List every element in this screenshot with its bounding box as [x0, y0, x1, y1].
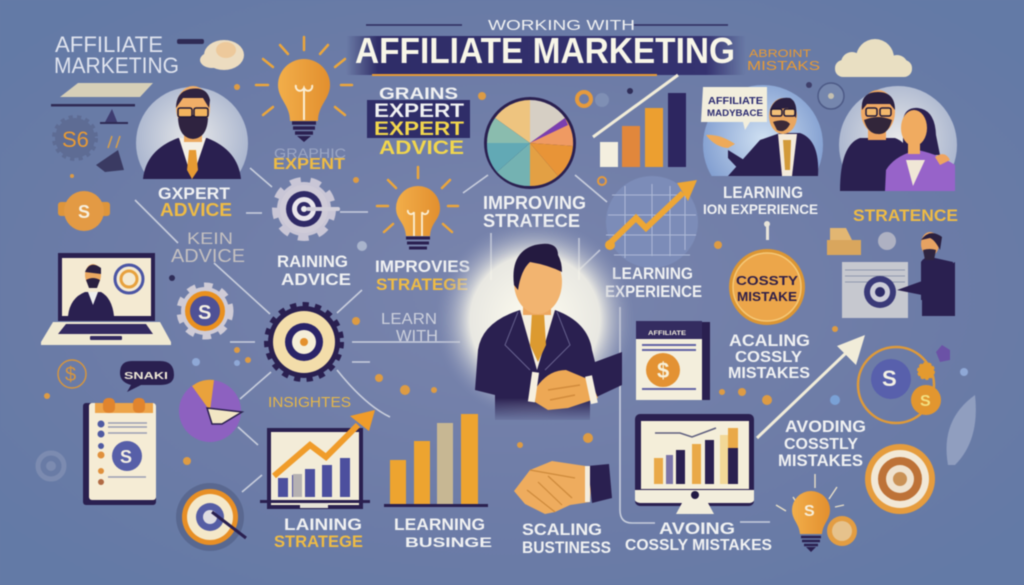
label: avoiding costly mistakes: COSSTLY	[784, 436, 858, 453]
label: acaling costly mistakes: ACALING	[729, 331, 810, 350]
icon: costly mistake coin	[729, 249, 805, 325]
label: avoing costly mistakes: AVOING	[659, 519, 735, 538]
speech bubble	[701, 87, 767, 130]
label: raining advice: RAINING	[277, 252, 348, 271]
icon: target right	[865, 444, 935, 514]
icon: coin left	[58, 191, 110, 231]
dark box	[367, 100, 470, 138]
suit	[475, 310, 622, 420]
chart: growth line on grid	[605, 176, 698, 268]
label: kein advice: KEIN	[187, 229, 233, 248]
label: learning business: LEARNING	[394, 515, 485, 534]
glow	[435, 220, 635, 420]
figure: presenter	[706, 98, 818, 176]
label: insightes: INSIGHTES	[268, 394, 351, 411]
label: improving strategy: IMPROVIES	[375, 257, 470, 276]
icon: dollar gear faint: S6	[62, 127, 89, 152]
label: learn with	[381, 311, 438, 345]
label: stratence: STRATENCE	[853, 206, 958, 225]
handshake	[535, 370, 598, 410]
label: improving strategy right: STRATECE	[483, 211, 580, 231]
title band	[346, 36, 746, 75]
heading: affiliate marketing corner: AFFILIATE	[55, 32, 163, 57]
label: expert advice: ADVICE	[160, 200, 232, 220]
icon: gear faint	[38, 453, 64, 479]
label: training strategy	[274, 515, 363, 551]
label: kein advice: ADVICE	[171, 246, 245, 266]
icon: clipboard	[83, 398, 156, 505]
speech bubble: MADYBACE	[707, 108, 763, 118]
chart: pie	[484, 97, 576, 189]
label: improving strategy	[375, 257, 470, 294]
label: acaling costly mistakes: COSSLY	[735, 349, 802, 366]
icon: small pin	[577, 88, 633, 185]
icon: book with dollar: $	[657, 358, 669, 383]
icon: small crate	[764, 221, 896, 255]
label: acaling costly mistakes: MISTAKES	[728, 365, 810, 382]
title	[346, 17, 746, 76]
icon: book with dollar: AFFILIATE	[648, 330, 687, 337]
label: learning experience center: EXPERIENCE	[605, 282, 702, 301]
label: expert advice: GXPERT	[158, 184, 231, 203]
icon: book with dollar	[636, 321, 710, 400]
icon: desk sketch	[51, 83, 153, 124]
icon: target lower left	[176, 483, 246, 551]
label: scaling business: SCALING	[522, 520, 602, 539]
label: expert under bulb	[273, 145, 346, 173]
label: expert advice	[158, 184, 232, 220]
label: expert under bulb: EXPENT	[273, 156, 345, 173]
panel: grains expert advice: EXPERT	[374, 101, 464, 122]
icon: dollar gear faint	[55, 118, 124, 172]
panel: expert portrait	[136, 85, 248, 180]
icon: monitor chart	[635, 414, 754, 514]
icon: dollar ring	[58, 360, 86, 388]
arrow: upward	[757, 335, 865, 438]
chart: rising bars bottom	[384, 414, 488, 507]
label: avoiding costly mistakes	[778, 417, 866, 470]
label: learning experience center	[605, 264, 702, 301]
illustration: central businessman	[435, 220, 635, 420]
icon: top-left cloud	[177, 39, 244, 70]
title main: AFFILIATE MARKETING	[355, 30, 735, 71]
panel: presenter	[700, 84, 824, 177]
label: kein advice	[171, 229, 245, 266]
label: improving strategy right	[483, 193, 586, 231]
icon: small dial	[806, 82, 844, 109]
title underline	[372, 74, 657, 76]
label: learning experience center: LEARNING	[612, 264, 693, 283]
label: raining advice	[277, 252, 351, 289]
icon: dollar ring: $	[65, 364, 76, 386]
label: improving strategy right: IMPROVING	[483, 193, 586, 213]
label: mistakes orange	[747, 48, 820, 73]
label: learning business	[394, 515, 492, 550]
icon: dollar cluster	[858, 345, 950, 423]
label: training strategy: STRATEGE	[274, 532, 363, 551]
panel: grains expert advice: EXPERT	[374, 119, 464, 140]
rays	[256, 37, 352, 115]
label: learning business: BUSINGE	[405, 534, 492, 550]
heading: affiliate marketing corner	[54, 32, 179, 78]
icon: costly mistake coin: COSSTY	[736, 273, 798, 288]
connector lines	[135, 168, 770, 523]
icon: clipboard: S	[120, 447, 132, 467]
label: training strategy: LAINING	[284, 515, 362, 534]
icon: feather	[947, 395, 976, 465]
icon: handshake bottom	[514, 461, 612, 514]
label: learn with: WITH	[396, 328, 438, 345]
label: learning experience upper	[703, 183, 818, 217]
label: mistakes orange: ABROINT	[749, 48, 811, 60]
illustration: laptop with growth chart	[260, 410, 375, 509]
figure: woman	[885, 108, 955, 191]
decorative small icons	[44, 84, 968, 465]
label: improving strategy: STRATEGE	[376, 275, 468, 294]
panel: grains expert advice: GRAINS	[379, 84, 458, 103]
icon: dollar cluster: S	[882, 366, 897, 391]
label: raining advice: ADVICE	[281, 270, 351, 289]
label: acaling costly mistakes	[728, 331, 810, 382]
label: scaling business: BUSTINESS	[522, 538, 611, 557]
icon: lightbulb one	[256, 37, 352, 142]
figure: expert	[143, 86, 241, 179]
illustration: laptop with person	[41, 253, 171, 345]
icon: dollar gear	[181, 287, 229, 335]
label: avoing costly mistakes: COSSLY MISTAKES	[625, 537, 772, 554]
callout: speech bubble snaki: SNAKI	[124, 371, 168, 382]
label: avoiding costly mistakes: MISTAKES	[778, 451, 863, 470]
callout: speech bubble snaki	[120, 361, 174, 392]
icon: coin left: S	[78, 202, 90, 222]
icon: costly mistake coin: MISTAKE	[737, 289, 797, 304]
icon: target gear dark	[268, 306, 340, 378]
chart: purple pie with card	[179, 380, 242, 442]
label: learning experience upper: ION EXPERIENCE	[703, 201, 818, 217]
head	[523, 290, 551, 315]
icon: dollar gear: S	[198, 302, 211, 324]
icon: small dollar bulb: S	[804, 503, 815, 520]
icon: small dollar bulb	[776, 474, 857, 552]
icon: lightbulb two	[377, 167, 458, 248]
label: mistakes orange: MISTAKS	[747, 58, 820, 73]
heading: affiliate marketing corner: MARKETING	[54, 53, 179, 78]
label: scaling business	[522, 520, 611, 557]
panel: grains expert advice	[367, 84, 470, 159]
title eyebrow: WORKING WITH	[488, 17, 635, 34]
label: learning experience upper: LEARNING	[723, 183, 803, 202]
chart: rising bars top	[593, 75, 686, 167]
figure: man	[840, 89, 904, 192]
label: avoiding costly mistakes: AVODING	[785, 417, 866, 436]
label: avoing costly mistakes	[625, 519, 772, 554]
panel: grains expert advice: ADVICE	[379, 138, 464, 159]
icon: target gear grey	[277, 182, 340, 236]
panel: couple portrait	[839, 86, 957, 204]
speech bubble: AFFILIATE	[708, 95, 763, 107]
icon: dollar cluster: S	[920, 393, 931, 410]
title rules	[366, 24, 728, 26]
illustration: person at device	[842, 232, 955, 318]
icon: cloud right	[835, 39, 912, 77]
label: learn with: LEARN	[381, 311, 437, 328]
label: expert under bulb: GRAPHIC	[274, 145, 346, 161]
